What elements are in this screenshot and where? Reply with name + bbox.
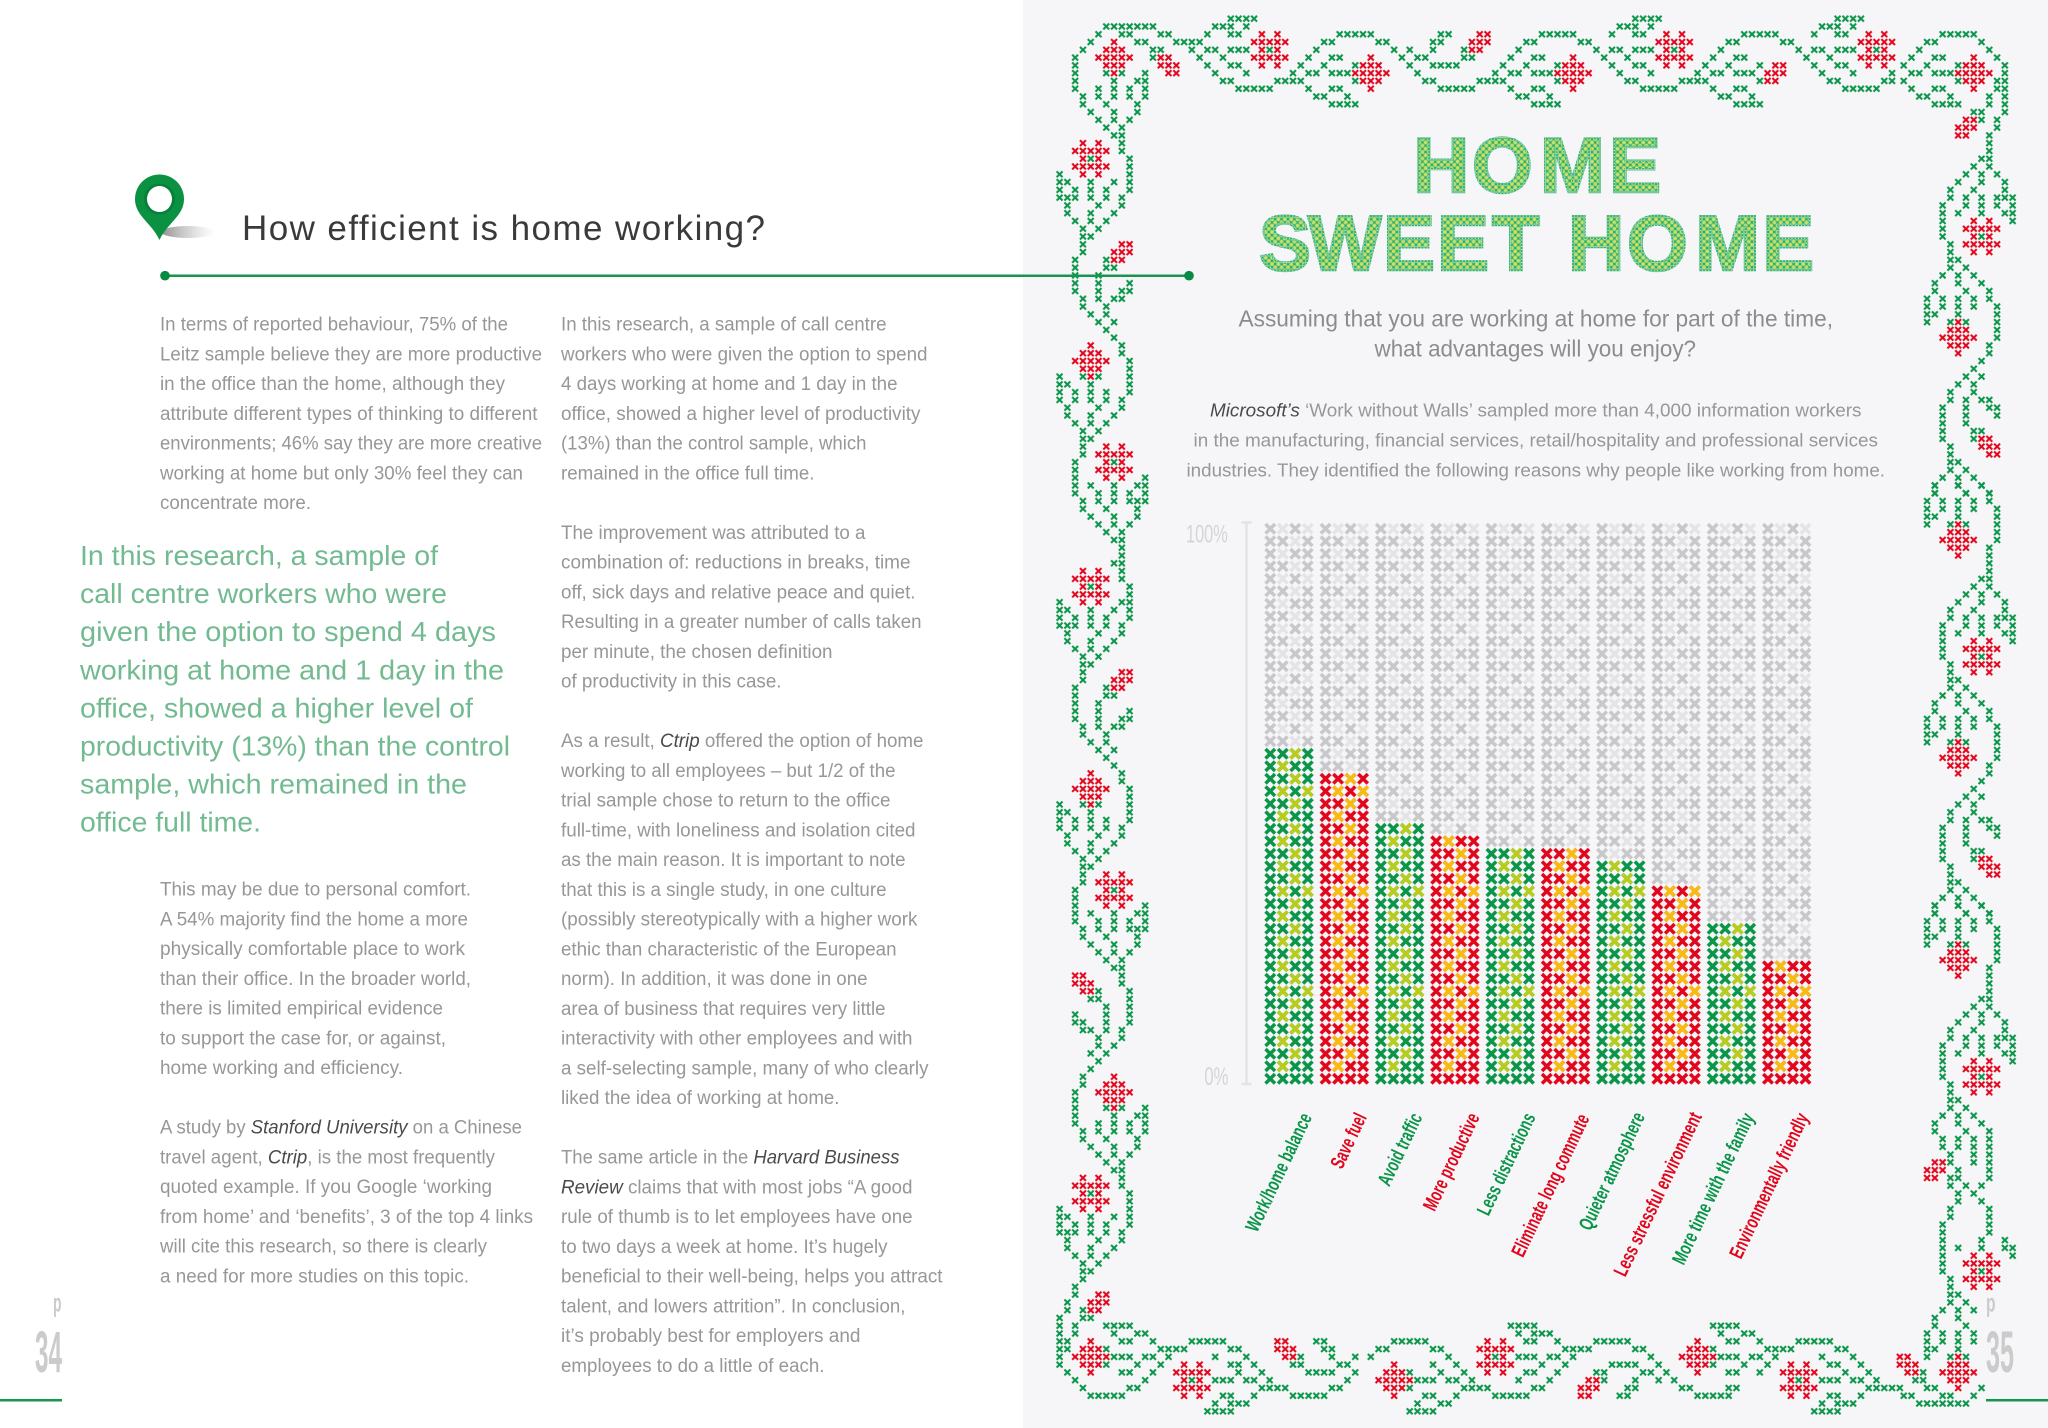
page number 34: p [53,1288,62,1318]
paragraph: Ctrip result: a self-selecting sample, many of who clearly [561,1058,929,1079]
left column text: paragraph 1: environments; 46% say they are more creative [160,434,542,454]
pull quote: office full time. [80,807,261,838]
intro text: Microsoft’s ‘Work without Walls’ sampled more than 4,000 information workers [1210,400,1862,421]
bar: Less distractions [1485,848,1535,1085]
subheading: what advantages will you enjoy? [1374,336,1696,362]
paragraph: Harvard Business Review: beneficial to their well-being, helps you attract [561,1266,943,1288]
bottom vine, green stitches [1056,1326,1927,1411]
page number 34 [0,1288,62,1402]
icon: map pin [135,174,215,240]
left page background [0,0,1024,1428]
paragraph: Ctrip result: (possibly stereotypically with a higher work [561,910,918,930]
left column text: paragraph 3 [159,1118,533,1287]
subheading [1238,306,1833,362]
paragraph: call centre trial: office, showed a higher level of productivity [561,404,921,425]
rotated category labels: More time with the family [1668,1109,1760,1268]
left column text: paragraph 1: attribute different types of thinking to different [160,404,538,425]
left column text: paragraph 3: from home’ and ‘benefits’, 3 of the top 4 links [160,1207,533,1228]
paragraph: improvement: combination of: reductions in breaks, time [561,552,910,574]
paragraph: Ctrip result: as the main reason. It is important to note [561,850,906,871]
bar: Quieter atmosphere [1596,860,1646,1085]
page number 35: p [1986,1288,1996,1318]
left column text: paragraph 1: In terms of reported behaviour, 75% of the [160,314,508,336]
rotated category labels: Save fuel [1327,1110,1372,1172]
grey background stitches [1264,522,1812,960]
rotated category labels [1242,1109,1814,1280]
paragraph: Ctrip result: interactivity with other employees and with [561,1028,912,1050]
left column text: paragraph 2: to support the case for, or against, [160,1028,446,1049]
bottom vine, red flowers [1071,1341,1919,1396]
pull quote [79,540,510,838]
paragraph: Harvard Business Review: The same article in the Harvard Business [561,1148,900,1168]
paragraph: Harvard Business Review: it’s probably best for employers and [561,1326,860,1347]
bar: More productive [1430,835,1480,1085]
paragraph: Harvard Business Review: Review claims that with most jobs “A good [561,1177,912,1198]
paragraph: improvement: of productivity in this case. [561,672,782,692]
title: Home Sweet Home: HOME [1413,121,1661,209]
paragraph: Harvard Business Review: talent, and lowers attrition”. In conclusion, [561,1296,906,1317]
page number 35 [1986,1288,2048,1402]
cross-stitch floral border [1056,19,2017,1411]
rotated category labels: Work/home balance [1242,1110,1317,1235]
y axis with labels [1186,520,1252,1091]
paragraph: Ctrip result: norm). In addition, it was done in one [561,969,868,990]
rotated category labels: Less stressful environment [1610,1109,1707,1280]
left column text: paragraph 3: quoted example. If you Google ‘working [160,1177,492,1198]
bar: Less stressful environment [1651,885,1701,1085]
middle column text [560,314,943,1377]
paragraph: Ctrip result: liked the idea of working at home. [561,1088,840,1109]
right page background [1023,0,2048,1428]
pull quote: In this research, a sample of [80,540,438,571]
text: 34 [35,1320,62,1385]
left column text: paragraph 1: working at home but only 30% feel they can [159,463,523,484]
pull quote: sample, which remained in the [80,769,467,800]
bar: Environmentally friendly [1762,960,1812,1085]
y axis with labels: 100% [1186,520,1228,548]
y axis with labels: 0% [1204,1063,1228,1091]
paragraph: call centre trial [560,314,928,484]
heading: How efficient is home working? [242,209,765,248]
paragraph: Ctrip result: ethic than characteristic of the European [561,939,896,960]
pull quote: working at home and 1 day in the [79,654,504,685]
bar: Avoid traffic [1375,822,1425,1085]
paragraph: call centre trial: (13%) than the control sample, which [561,434,866,454]
pull quote: productivity (13%) than the control [80,730,510,762]
top vine, repeating stems and flowers [1204,19,1896,104]
paragraph: Harvard Business Review: employees to do a little of each. [561,1356,824,1377]
bar: Work/home balance [1264,748,1314,1085]
paragraph: Harvard Business Review: to two days a week at home. It’s hugely [561,1237,888,1258]
paragraph: Ctrip result: trial sample chose to return to the office [561,790,890,812]
left column text: paragraph 1: Leitz sample believe they are more productive [160,344,542,365]
left column text: paragraph 2: than their office. In the broader world, [160,969,471,990]
paragraph: improvement: per minute, the chosen definition [561,642,832,663]
left column text: paragraph 2: home working and efficiency. [160,1058,403,1079]
rotated category labels: Eliminate long commute [1508,1111,1594,1260]
left column text: paragraph 2: This may be due to personal comfort. [160,880,471,900]
intro text: industries. They identified the following reasons why people like working from home. [1186,460,1885,481]
rotated category labels: Avoid traffic [1374,1110,1427,1189]
left column text: paragraph 1 [159,314,542,514]
bar: More time with the family [1706,922,1756,1085]
intro text: in the manufacturing, financial services, retail/hospitality and professional services [1194,430,1878,451]
paragraph: Harvard Business Review: rule of thumb is to let employees have one [561,1207,912,1228]
bar: Save fuel [1319,772,1369,1085]
top and left vine, green stitches [1056,26,1204,1318]
paragraph: improvement: off, sick days and relative peace and quiet. [561,582,916,603]
left column text: paragraph 3: travel agent, Ctrip, is the most frequently [160,1147,495,1168]
rotated category labels: Less distractions [1473,1110,1541,1219]
paragraph: Ctrip result [560,731,929,1109]
left vine, red flowers [1071,42,1180,1310]
left column text: paragraph 2 [160,880,471,1079]
title: Home Sweet Home: SWEET HOME [1259,199,1814,287]
rotated category labels: Environmentally friendly [1726,1109,1814,1262]
paragraph: improvement [561,523,922,692]
left column text: paragraph 3: will cite this research, so there is clearly [159,1236,487,1258]
paragraph: call centre trial: 4 days working at home and 1 day in the [561,374,898,395]
paragraph: call centre trial: In this research, a sample of call centre [561,314,886,336]
pull quote: given the option to spend 4 days [80,616,496,647]
pull quote: office, showed a higher level of [80,692,473,723]
right vine with flowers and leaves [1900,34,2017,1404]
paragraph: Ctrip result: working to all employees – but 1/2 of the [560,761,896,782]
left column text: paragraph 2: there is limited empirical evidence [160,998,443,1020]
left column text: paragraph 2: physically comfortable place to work [160,939,465,960]
paragraph: improvement: Resulting in a greater number of calls taken [561,612,922,633]
bar: Eliminate long commute [1540,848,1590,1085]
left column text: paragraph 1: in the office than the home, although they [160,374,505,395]
paragraph: Ctrip result: full-time, with loneliness and isolation cited [561,820,916,841]
left column text: paragraph 1: concentrate more. [160,493,311,514]
left column text: paragraph 3: A study by Stanford University on a Chinese [160,1118,522,1138]
paragraph: Ctrip result: area of business that requires very little [561,999,886,1020]
paragraph: improvement: The improvement was attributed to a [561,523,866,544]
paragraph: Ctrip result: As a result, Ctrip offered the option of home [561,731,924,752]
rotated category labels: Quieter atmosphere [1575,1109,1650,1234]
rule with end dots [160,271,1194,281]
pull quote: call centre workers who were [80,578,447,609]
paragraph: Harvard Business Review [561,1148,943,1377]
paragraph: Ctrip result: that this is a single study, in one culture [561,880,886,901]
subheading: Assuming that you are working at home for part of the time, [1238,306,1833,332]
intro text [1186,400,1885,481]
left column text: paragraph 2: A 54% majority find the home a more [160,909,468,930]
section heading with pin and rule [135,174,1194,281]
cross-stitch bar chart [1186,520,1814,1280]
paragraph: call centre trial: workers who were given the option to spend [560,344,928,365]
paragraph: call centre trial: remained in the office full time. [561,463,814,484]
rotated category labels: More productive [1419,1110,1485,1214]
left column text: paragraph 3: a need for more studies on this topic. [160,1266,469,1287]
